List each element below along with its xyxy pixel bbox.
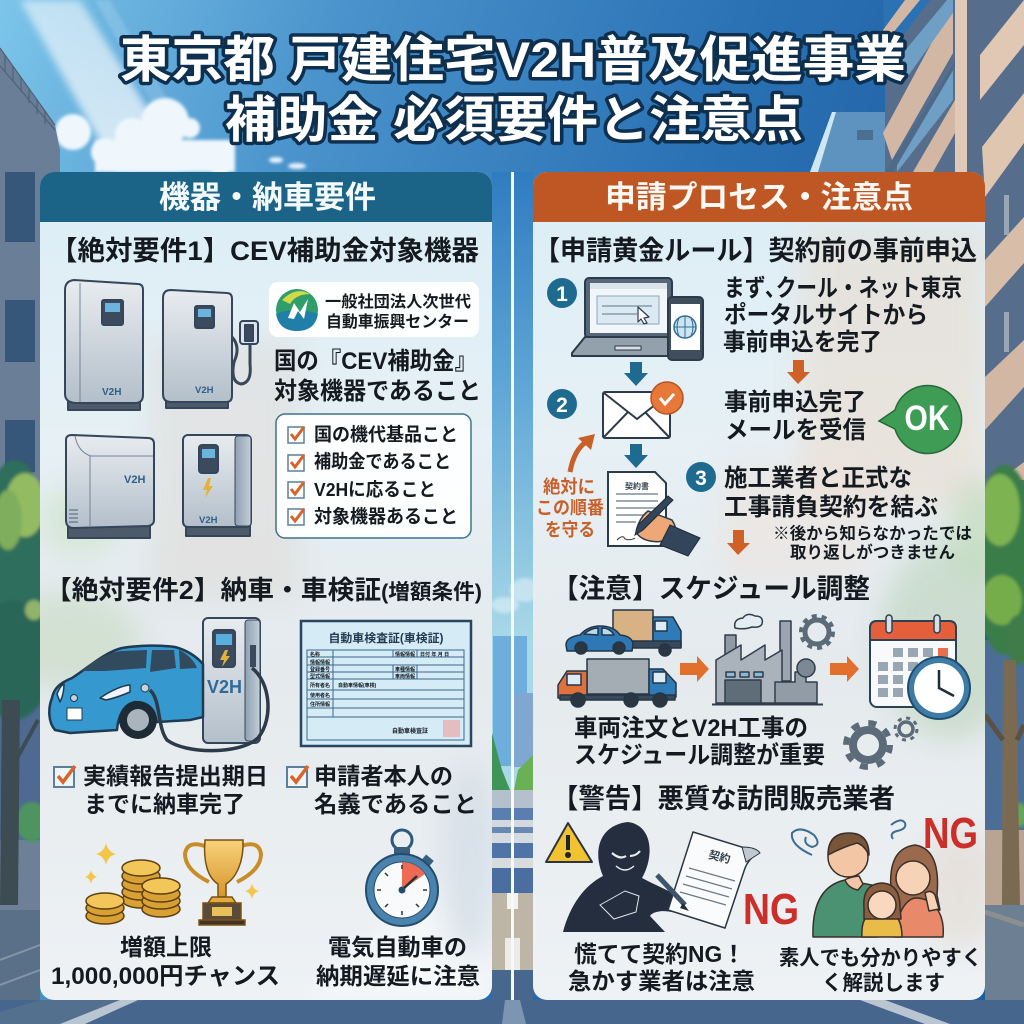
vehicle inspection certificate: 使用者名 xyxy=(310,692,330,699)
text: increase cap: 1,000,000円チャンス xyxy=(51,963,280,990)
text: keep this order: この順番 xyxy=(536,498,604,518)
section header: 機器・納車要件: 機器・納車要件 xyxy=(159,180,376,215)
heading: warning about door-to-door sellers: 【警告】悪質な訪問販売業者 xyxy=(552,784,895,814)
icon: large truck xyxy=(558,659,676,707)
text: step 1 instruction: ポータルサイトから xyxy=(724,302,928,329)
text: hurried contract warning: 慌てて契約NG！ xyxy=(574,941,745,967)
icon: laptop and smartphone xyxy=(572,278,703,360)
icon: car and delivery truck xyxy=(566,610,681,656)
vehicle inspection certificate: 情報情報 xyxy=(395,651,415,658)
icon: calendar with clock xyxy=(870,615,970,719)
arrow: down to contract xyxy=(624,444,648,468)
label: NG right: NG xyxy=(923,809,978,858)
check row 3: V2Hに応ること xyxy=(314,479,436,500)
icon: V2H cabinet low xyxy=(66,435,154,538)
check row 1: 国の機代基品こと xyxy=(314,424,458,445)
icon: confusion swirls xyxy=(792,820,905,855)
arrow: down to email text xyxy=(787,360,810,384)
heading: golden rule: 【申請黄金ルール】契約前の事前申込 xyxy=(534,236,977,266)
callout: OK bubble: OK xyxy=(904,399,950,438)
text: easy explanation: 素人でも分かりやすく xyxy=(779,947,982,970)
title xyxy=(120,32,906,148)
text: hurried contract warning: 急かす業者は注意 xyxy=(568,968,755,994)
text: delivery delay warning: 納期遅延に注意 xyxy=(316,963,480,989)
arrow: factory to calendar xyxy=(830,656,859,682)
arrow: down to schedule xyxy=(727,530,750,555)
front wheel xyxy=(119,701,157,739)
child xyxy=(862,883,902,937)
check: delivery deadline xyxy=(54,763,268,817)
logo: next generation vehicle promotion center: 一般社団法人次世代 xyxy=(325,292,471,311)
text: keep this order: を守る xyxy=(545,520,595,540)
text: schedule adjustment xyxy=(574,715,825,769)
text: easy explanation: く解説します xyxy=(822,972,945,995)
text: easy explanation xyxy=(779,947,982,995)
heading: requirement 2: 【絶対要件2】納車・車検証 (増額条件) xyxy=(45,575,482,605)
panel: application process and cautions xyxy=(533,172,1020,1000)
icon: contract document xyxy=(657,832,760,928)
text: step 1 instruction: まず､クール・ネット東京 xyxy=(724,275,962,302)
note: irreversible: ※後から知らなかったでは xyxy=(773,523,972,543)
mother xyxy=(891,845,943,937)
text: delivery delay warning: 電気自動車の xyxy=(328,934,467,960)
illustration: blue EV plugged into V2H charger xyxy=(49,618,268,751)
title: 補助金 必須要件と注意点 xyxy=(225,92,803,148)
check: applicant's name xyxy=(287,763,477,817)
text: step 3 instruction: 工事請負契約を結ぶ xyxy=(724,494,938,521)
icon: V2H cabinet low: V2H xyxy=(124,474,145,486)
text: step 3 instruction: 施工業者と正式な xyxy=(724,465,912,492)
car body xyxy=(49,646,203,733)
text: step 1 instruction: 事前申込を完了 xyxy=(723,329,882,356)
center divider xyxy=(511,172,514,1000)
text: step 2 instruction: メールを受信 xyxy=(725,417,866,444)
note: irreversible xyxy=(773,523,972,562)
note: irreversible: 取り返しがつきません xyxy=(790,542,955,562)
text: schedule adjustment: 車両注文とV2H工事の xyxy=(574,715,808,742)
step badge 3: 3 xyxy=(695,467,707,490)
icon: factory xyxy=(712,614,823,704)
vehicle inspection certificate xyxy=(301,621,471,746)
icon: warning triangle xyxy=(546,823,592,862)
label: NG left: NG xyxy=(743,885,799,934)
text: step 1 instruction xyxy=(723,275,962,356)
icon: gold coins xyxy=(85,843,180,924)
check: delivery deadline: 実績報告提出期日 xyxy=(83,763,268,789)
check row 2: 補助金であること xyxy=(314,451,451,472)
icon: V2H cabinet 1 xyxy=(65,280,143,410)
vehicle inspection certificate: 車種情報 xyxy=(395,666,415,673)
check: delivery deadline: までに納車完了 xyxy=(84,791,245,817)
step badge 2 xyxy=(547,389,577,419)
vehicle inspection certificate: 型式情報 xyxy=(310,673,330,680)
text: step 2 instruction xyxy=(724,389,866,444)
icon: gold trophy xyxy=(185,840,261,925)
icon: email with check xyxy=(603,382,683,438)
arrow: curved order reminder xyxy=(570,434,595,472)
icon: signing contract xyxy=(608,472,700,556)
logo: next generation vehicle promotion center: 自動車振興センター xyxy=(326,312,469,331)
vehicle inspection certificate: 情報情報 xyxy=(310,659,330,666)
charger: V2H xyxy=(207,677,242,697)
vehicle inspection certificate: 自動車情報(車検) xyxy=(338,682,377,689)
icon: shady salesman silhouette xyxy=(563,822,686,932)
step badge 3 xyxy=(686,462,716,492)
text: step 2 instruction: 事前申込完了 xyxy=(724,389,866,416)
icon: signing contract: 契約書 xyxy=(625,481,649,491)
father xyxy=(813,833,877,937)
logo: next generation vehicle promotion center xyxy=(269,282,479,337)
vehicle inspection certificate: 自動車検査証(車検証) xyxy=(328,631,444,645)
text: CEV subsidy eligibility: 国の『CEV補助金』 xyxy=(274,348,477,375)
section header: 機器・納車要件 xyxy=(40,172,492,222)
icon: V2H wallbox with bolt: V2H xyxy=(199,515,218,526)
arrow: down to email xyxy=(624,362,648,386)
vehicle inspection certificate: 所有者名 xyxy=(310,682,330,689)
charger xyxy=(203,618,260,743)
step badge 1 xyxy=(547,278,577,308)
section header: 申請プロセス・注意点: 申請プロセス・注意点 xyxy=(605,180,913,215)
title: 東京都 戸建住宅V2H普及促進事業 xyxy=(120,32,906,88)
check row 4: 対象機器あること xyxy=(314,506,458,527)
icon: stopwatch xyxy=(366,830,438,926)
section header: 申請プロセス・注意点 xyxy=(533,172,985,222)
heading: schedule caution: 【注意】スケジュール調整 xyxy=(552,574,870,604)
step badge 2: 2 xyxy=(556,394,568,417)
icon: V2H wallbox with bolt xyxy=(183,435,251,536)
logo mark xyxy=(276,289,318,331)
text: increase cap xyxy=(51,934,280,990)
vehicle inspection certificate: 登録番号 xyxy=(310,666,330,673)
callout: OK bubble xyxy=(879,386,962,454)
icon: V2H charger with cable xyxy=(163,290,258,408)
arrow: trucks to factory xyxy=(680,656,709,682)
text: increase cap: 増額上限 xyxy=(120,934,212,960)
text: step 3 instruction xyxy=(724,465,938,521)
text: schedule adjustment: スケジュール調整が重要 xyxy=(574,741,825,769)
text: CEV subsidy eligibility xyxy=(274,348,481,405)
vehicle inspection certificate: 車両情報 xyxy=(395,673,415,680)
icon: contract document: 契約 xyxy=(707,847,732,866)
text: keep this order xyxy=(536,477,604,540)
icon: gear xyxy=(801,616,833,648)
vehicle inspection certificate: 名称 xyxy=(310,651,320,658)
text: keep this order: 絶対に xyxy=(543,477,595,497)
icon: gears xyxy=(846,718,917,767)
step badge 1: 1 xyxy=(556,283,568,306)
vehicle inspection certificate: 自動車検査証 xyxy=(392,727,428,735)
check: applicant's name: 名義であること xyxy=(314,791,477,817)
vehicle inspection certificate: 日付 年 月 日 xyxy=(420,651,449,658)
text: delivery delay warning xyxy=(316,934,480,989)
check: applicant's name: 申請者本人の xyxy=(314,763,453,789)
vehicle inspection certificate: 住所情報 xyxy=(310,701,330,708)
icon: V2H cabinet 1: V2H xyxy=(102,387,121,398)
checklist: eligibility items xyxy=(276,414,471,538)
heading: requirement 1: 【絶対要件1】CEV補助金対象機器 xyxy=(50,236,479,266)
text: hurried contract warning xyxy=(568,941,755,994)
icon: V2H charger with cable: V2H xyxy=(195,385,214,396)
illustration: worried family xyxy=(813,833,943,937)
text: CEV subsidy eligibility: 対象機器であること xyxy=(274,378,481,405)
panel: equipment and delivery requirements xyxy=(0,172,500,1000)
